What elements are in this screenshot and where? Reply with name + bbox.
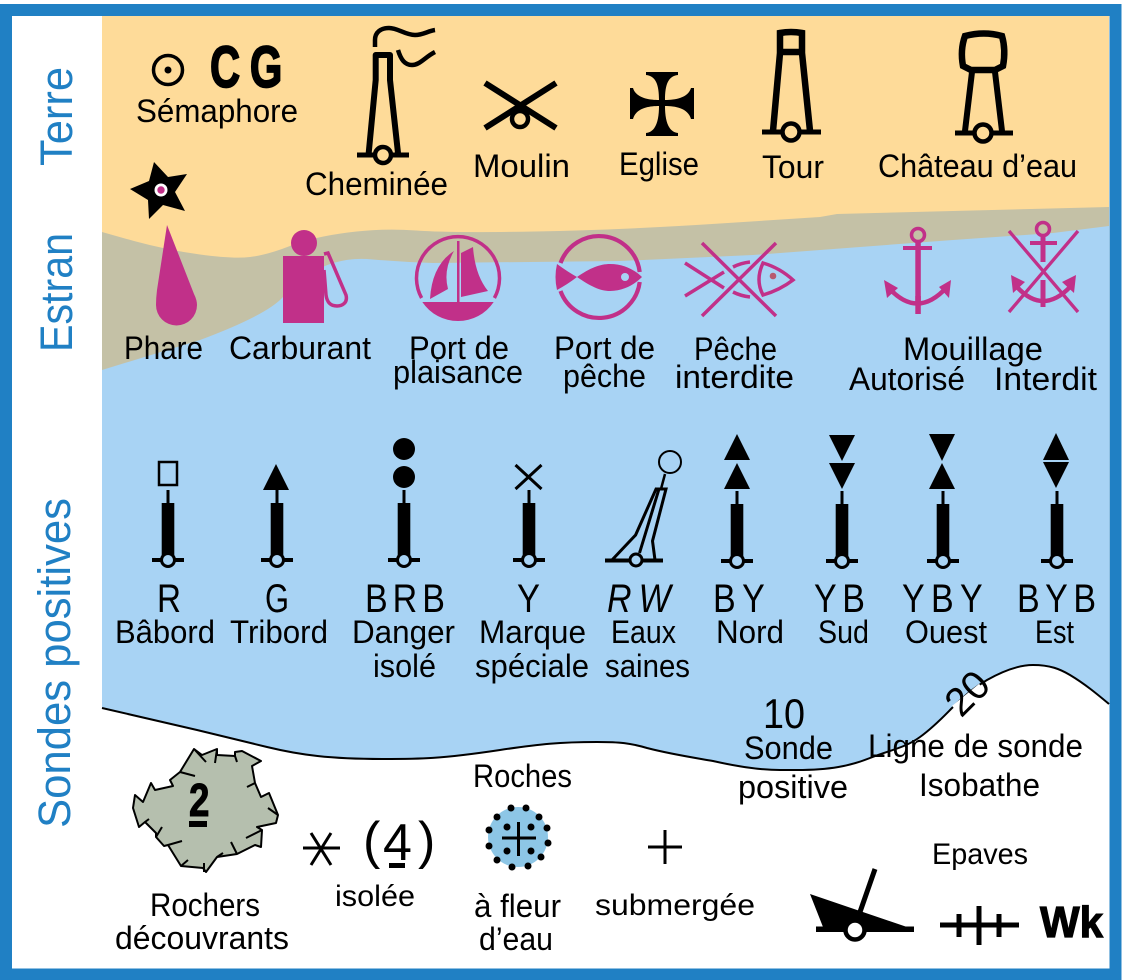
icon: semaphore: CG	[210, 34, 292, 100]
heading: Terre: Terre	[31, 67, 82, 166]
icon: drying rocks: 2	[189, 774, 209, 826]
label: Rochers découvrants: découvrants	[115, 920, 289, 956]
buoy: Y Marque spéciale: Y	[517, 577, 540, 621]
label: Wk: Wk	[1040, 898, 1104, 947]
label: Sémaphore: Sémaphore	[136, 93, 298, 129]
label: Pêche interdite	[675, 331, 794, 395]
label: Tour: Tour	[762, 149, 824, 185]
icon: fuel pump	[283, 230, 346, 323]
icon: chimney	[357, 28, 435, 163]
buoy: BYB Est: BYB	[1017, 575, 1096, 621]
icon: water tower	[955, 34, 1013, 142]
buoy: BYB Est	[1017, 433, 1096, 650]
buoy: BRB Danger isolé: isolé	[373, 648, 436, 684]
sounding: (4): (	[363, 812, 381, 870]
buoy: R Bâbord: R	[157, 577, 181, 621]
buoy: RW Eaux saines	[605, 451, 690, 684]
icon: wreck line	[940, 906, 1019, 945]
label: Phare: Phare	[124, 330, 203, 366]
icon: fishing prohibited	[685, 243, 793, 316]
label: Autorisé: Autorisé	[849, 361, 965, 397]
icon: submerged rock	[648, 830, 682, 864]
buoy: R Bâbord: Bâbord	[115, 614, 215, 650]
panel: buoys	[115, 433, 1096, 684]
buoy: BRB Danger isolé: Danger	[352, 614, 455, 650]
icon: marina	[416, 237, 500, 321]
panel: estran symbols	[124, 162, 1097, 397]
zone: estran	[102, 207, 1109, 380]
isobath line	[102, 665, 1109, 770]
label: Rochers découvrants: Rochers	[150, 887, 260, 923]
label: Port de plaisance: Port de	[409, 330, 509, 366]
buoy: YB Sud: YB	[814, 575, 865, 621]
label: Roches: Roches	[473, 758, 572, 794]
icon: anchorage prohibited	[1009, 222, 1078, 312]
label: à fleur d'eau	[474, 888, 561, 957]
icon: lighthouse	[130, 162, 197, 325]
buoy: YBY Ouest	[902, 434, 987, 650]
sounding: 10: 10	[763, 690, 805, 737]
buoy: RW Eaux saines: saines	[605, 648, 690, 684]
icon: church	[630, 72, 694, 136]
panel: rocks	[115, 749, 755, 957]
buoy: BRB Danger isolé: BRB	[365, 575, 445, 621]
panel: terre symbols	[136, 28, 1077, 202]
sounding: (4): 4	[383, 814, 412, 872]
buoy: YB Sud	[814, 435, 869, 650]
buoy: G Tribord: Tribord	[230, 614, 328, 650]
buoy: YB Sud: Sud	[818, 614, 869, 650]
icon: fishing port	[556, 236, 642, 318]
label: Sonde positive	[738, 730, 848, 805]
buoy: BY Nord	[713, 434, 784, 650]
buoy: YBY Ouest: YBY	[902, 575, 983, 621]
buoy: BYB Est: Est	[1035, 614, 1074, 650]
label: à fleur d'eau: d’eau	[479, 921, 553, 957]
label: Interdit: Interdit	[994, 361, 1097, 397]
heading: Estran: Estran	[31, 233, 82, 352]
label: Ligne de sonde Isobathe	[868, 728, 1083, 803]
label: Port de pêche	[554, 330, 655, 394]
label: Cheminée: Cheminée	[305, 166, 448, 202]
zone: sondes positives	[102, 226, 1109, 770]
icon: anchorage allowed	[884, 228, 951, 314]
zone: terre	[102, 16, 1109, 316]
buoy: R Bâbord	[115, 462, 215, 650]
label: Moulin: Moulin	[473, 148, 570, 184]
buoy: Y Marque spéciale: Marque	[479, 614, 586, 650]
label: Port de plaisance: plaisance	[393, 354, 523, 390]
map background	[102, 16, 1109, 770]
zone labels	[29, 67, 82, 828]
buoy: RW Eaux saines: RW	[607, 575, 673, 621]
label: Château d'eau: Château d’eau	[878, 148, 1077, 184]
label: Pêche interdite: Pêche	[694, 331, 777, 367]
sounding: (4): )	[418, 812, 435, 870]
label: Sonde positive: positive	[738, 769, 848, 805]
buoy: G Tribord	[230, 464, 328, 650]
label: à fleur d'eau: à fleur	[474, 888, 561, 924]
label: Ligne de sonde Isobathe: Isobathe	[919, 767, 1040, 803]
icon: semaphore	[154, 34, 292, 100]
label: Carburant: Carburant	[229, 330, 371, 366]
label: Rochers découvrants	[115, 887, 289, 956]
buoy: BRB Danger isolé	[352, 438, 455, 684]
buoy: G Tribord: G	[265, 577, 289, 621]
panel: wrecks	[810, 838, 1104, 947]
label: Port de pêche: Port de	[554, 330, 655, 366]
icon: wreck hull	[810, 869, 914, 940]
label: isolée: isolée	[335, 880, 415, 913]
label: submergée: submergée	[595, 889, 755, 922]
buoy: YBY Ouest: Ouest	[905, 614, 987, 650]
label: Epaves: Epaves	[932, 838, 1028, 871]
label: Port de plaisance	[393, 330, 523, 390]
label: Sonde positive: Sonde	[744, 730, 833, 766]
buoy: Y Marque spéciale: spéciale	[475, 648, 589, 684]
buoy: RW Eaux saines: Eaux	[611, 614, 676, 650]
label: Pêche interdite: interdite	[675, 359, 794, 395]
icon: tower	[762, 32, 821, 140]
isobath label: 20: 20	[936, 662, 999, 725]
label: Ligne de sonde Isobathe: Ligne de sonde	[868, 728, 1083, 764]
heading: Sondes positives: Sondes positives	[29, 498, 80, 828]
icon: drying rocks	[133, 749, 278, 872]
label: Port de pêche: pêche	[563, 358, 646, 394]
buoy: BY Nord: BY	[713, 575, 765, 621]
buoy: Y Marque spéciale	[475, 465, 589, 684]
buoy: BY Nord: Nord	[716, 614, 784, 650]
sounding: (4)	[363, 812, 435, 872]
label: Eglise: Eglise	[619, 146, 699, 182]
icon: isolated rock	[303, 833, 340, 865]
icon: awash rock	[486, 804, 552, 870]
icon: windmill	[485, 83, 556, 128]
panel: soundings	[738, 662, 1083, 805]
label: Mouillage: Mouillage	[903, 331, 1043, 367]
